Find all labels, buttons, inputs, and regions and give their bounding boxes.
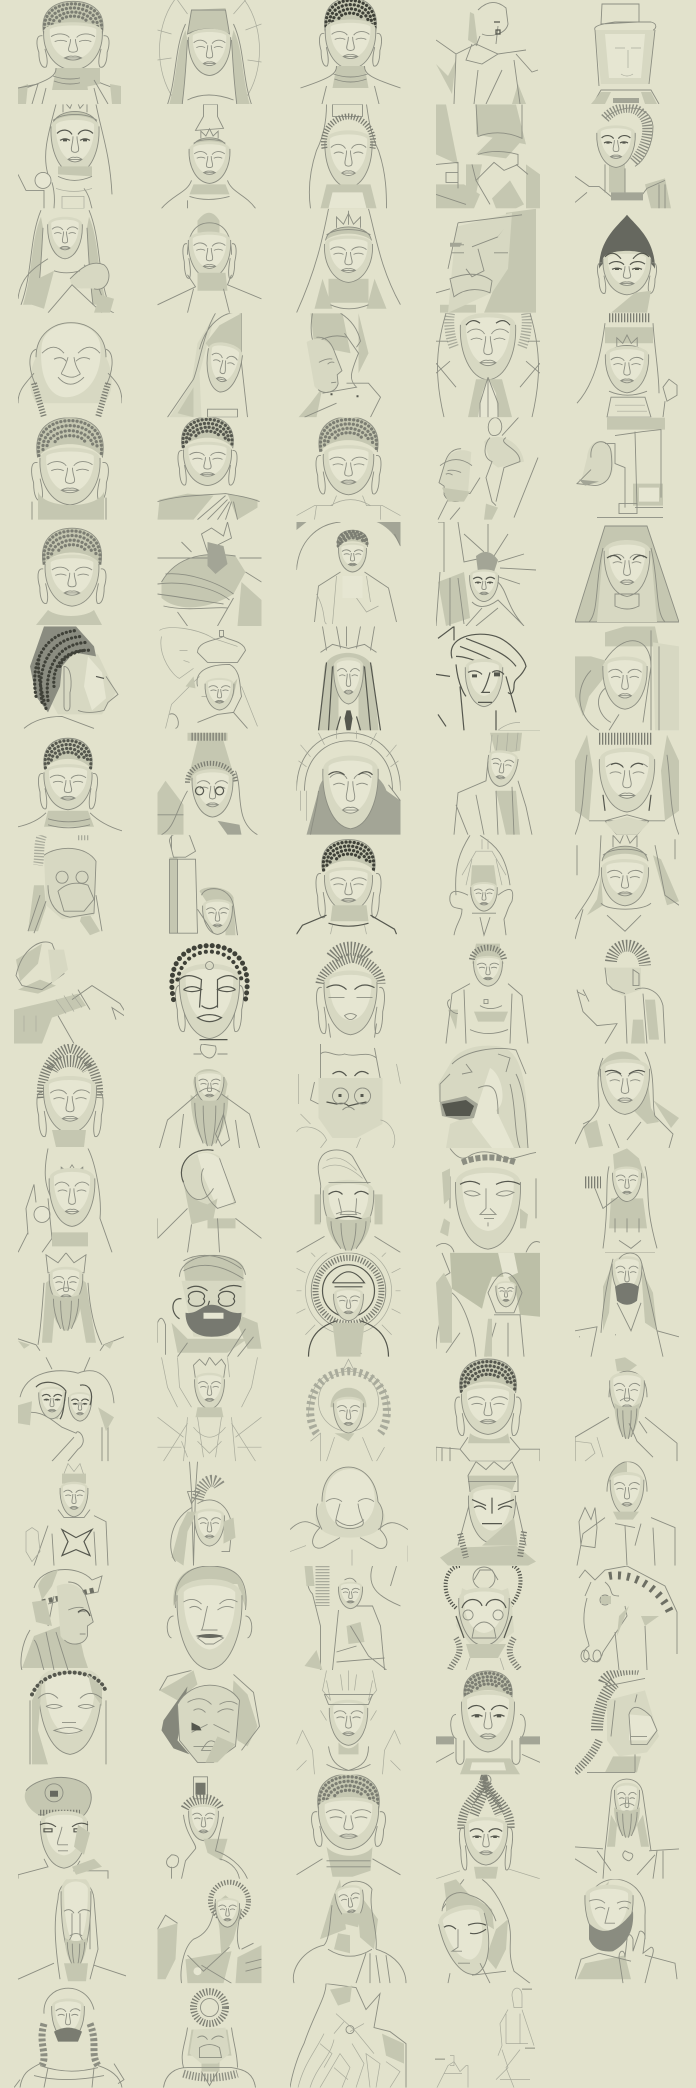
- bald man with moustache: [167, 1566, 252, 1670]
- face with praying hands: [436, 313, 540, 418]
- mother and child with halos: [18, 1357, 114, 1461]
- laughing bald Budai: [18, 322, 122, 417]
- woman with dark hair and shoulders: [575, 1052, 679, 1148]
- Buddha in flame halo: [308, 1359, 388, 1461]
- Christ with long hair and beard: [575, 1253, 679, 1357]
- abstract cropped folds: [436, 104, 540, 208]
- veiled Madonna with dark lines: [318, 626, 382, 730]
- bearded sage: [160, 1044, 260, 1148]
- pale bodhisattva with necklace: [575, 831, 679, 939]
- dark-haired Buddha, long ears: [296, 840, 396, 934]
- small standing Buddha with raised hand: [446, 944, 528, 1044]
- man in naval cap: [18, 1777, 108, 1879]
- portrait: figure in tall square hat: [591, 4, 660, 104]
- textured horse head, pale lines: [290, 1984, 406, 2088]
- Guanyin with tilted head: [435, 1879, 530, 1983]
- helmeted figure from behind: [158, 1150, 262, 1252]
- elongated Christ statue: [18, 1875, 136, 1981]
- Hanuman with sun crown: [164, 1992, 256, 2088]
- fierce king with round eyes: [296, 1044, 400, 1148]
- portrait: woman statue looking up: [436, 2, 538, 104]
- Hanuman with halo: [446, 1566, 520, 1670]
- horse head with mane: [579, 1566, 677, 1670]
- Christ with long curls and toga: [14, 1988, 124, 2088]
- small knight against large grey field: [436, 1253, 540, 1357]
- pale Buddha: [296, 418, 400, 520]
- Buddha profile with dark curls: [24, 626, 118, 729]
- Buddha with heavy brows: [296, 1774, 400, 1877]
- Buddha, rounded head: [36, 528, 106, 625]
- portrait: stone Buddha: [18, 0, 121, 104]
- pale Buddha with tall hair: [37, 1048, 103, 1147]
- Buddha, closed smile: [18, 738, 122, 832]
- Madonna in trapezoid veil: [575, 526, 679, 622]
- small bodhisattva with raised palm: [26, 1464, 108, 1566]
- woman with crown and child: [160, 627, 258, 729]
- bearded saint with open hand: [575, 1879, 677, 1983]
- serene bodhisattva with knot: [158, 212, 262, 313]
- Buddha with big dark curls: [172, 946, 247, 1040]
- veiled guanyin in profile: [167, 313, 248, 418]
- Hanuman in profile with ornate crown: [575, 1670, 659, 1772]
- raised arm beside small head: [170, 833, 238, 935]
- bodhisattva holding orb: [18, 1148, 112, 1252]
- woman with ornate bun: [575, 626, 679, 730]
- monk with raised palm: [577, 1462, 675, 1566]
- thousand-armed bodhisattva: [158, 1357, 262, 1461]
- crowned deity with elephant: [158, 732, 258, 835]
- dark-crowned Buddha: [436, 1359, 540, 1461]
- slim Christ with sacred heart: [573, 1779, 681, 1879]
- ornate crowned face: [575, 732, 679, 835]
- portrait: dark-haired Buddha: [300, 0, 400, 104]
- Statue of Liberty: [436, 522, 536, 626]
- slender Guanyin in robes: [454, 732, 532, 835]
- two figures, climbing child: [438, 418, 538, 520]
- small scale diagram: standing Buddha and horse rider: [435, 1988, 535, 2088]
- small bodhisattva with flowers: [585, 1148, 657, 1252]
- winged Madonna with stars: [158, 1882, 262, 1983]
- figure with beaded tiara: [436, 1148, 540, 1252]
- crowned figure with tall headdress: [167, 1777, 248, 1879]
- lion head statue: [438, 1046, 528, 1148]
- Christ gazing upward: [293, 1879, 406, 1983]
- Guan Yu with long beard: [158, 522, 262, 626]
- old man in head wrap, with beard: [158, 1255, 262, 1357]
- large carved face in shadow: [436, 209, 536, 312]
- figure in flaming mandorla: [450, 835, 513, 935]
- portrait: guanyin beaded crown: [308, 104, 387, 208]
- warrior with sword and armour: [304, 1566, 400, 1670]
- Buddha with tall curled topknot: [317, 949, 384, 1038]
- woman with staff and flowing hair: [171, 1462, 236, 1566]
- bearded warrior: [296, 1150, 400, 1252]
- pale deity with headdress: [296, 1670, 400, 1774]
- veiled guanyin with crown: [296, 208, 400, 313]
- bearded man with topknot: [575, 1357, 677, 1461]
- portrait: bodhisattva with top knot: [161, 104, 256, 208]
- small standing Buddha in arch: [296, 522, 400, 624]
- woman in turban: [436, 626, 540, 730]
- helmeted figure in profile: [21, 1570, 102, 1670]
- crowned bearded Christ: [18, 1253, 124, 1351]
- crowned figure in profile: [299, 313, 381, 418]
- man in hat with outstretched arm: [14, 942, 130, 1044]
- Buddha with tall forehead: [30, 1667, 106, 1764]
- monkey god with muzzle: [28, 835, 102, 935]
- crowned warrior: [440, 1462, 536, 1566]
- Buddha in profile, raised hand: [577, 946, 665, 1044]
- Buddha with dark brows and earrings: [436, 1671, 540, 1774]
- Buddha with pleated robe: [158, 418, 260, 520]
- Buddha with tall pointed hair: [436, 1775, 540, 1879]
- elephant with rider: [576, 418, 665, 518]
- large Buddha: [31, 418, 109, 520]
- woman with wavy hair: [575, 104, 671, 208]
- portrait: bodhisattva with pearl: [18, 104, 112, 208]
- bodhisattva with lotus: [576, 313, 678, 418]
- Buddha with dark pointed hair: [597, 214, 657, 312]
- woman with child: [18, 210, 114, 313]
- pale laughing Budai: [290, 1467, 408, 1566]
- bodhisattva with ringed radiant halo: [290, 1231, 407, 1357]
- weathered cracked face: [160, 1670, 260, 1762]
- portrait: crowned bodhisattva with halo: [158, 0, 262, 104]
- Madonna with radiant halo: [296, 730, 400, 835]
